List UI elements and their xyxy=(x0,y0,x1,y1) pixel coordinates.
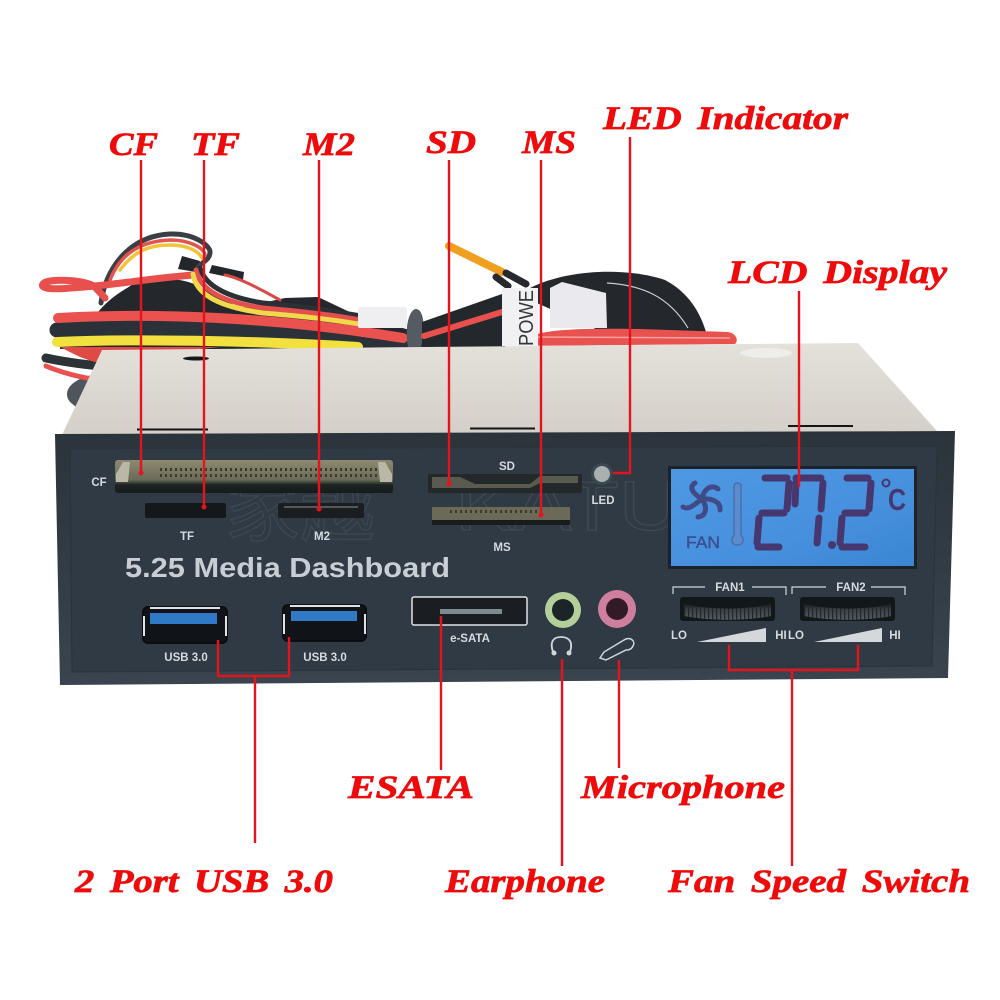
fan 2 switch: LO xyxy=(788,630,804,642)
thin red wires xyxy=(225,275,280,300)
SD slot: SD xyxy=(499,461,515,473)
fan 1 switch xyxy=(671,582,787,642)
icon: fan xyxy=(683,483,720,517)
M2 slot: M2 xyxy=(314,531,330,543)
callout: MS: MS xyxy=(521,125,576,161)
red loop cable xyxy=(42,275,194,298)
icon: thermometer xyxy=(732,483,743,545)
SD slot xyxy=(428,461,582,493)
power label: POWE xyxy=(516,290,538,346)
callout: Earphone: Earphone xyxy=(444,864,605,900)
USB port 2 xyxy=(283,605,366,664)
right black cable loop xyxy=(530,272,706,334)
faint watermark: 家越 xyxy=(225,467,375,551)
dark cable coil xyxy=(60,279,505,349)
fan 1 switch: FAN1 xyxy=(715,582,745,594)
callout: SD: SD xyxy=(426,125,476,161)
callout: LED Indicator: LED Indicator xyxy=(602,101,849,137)
fan 2 switch: FAN2 xyxy=(836,582,866,594)
fan 1 switch: LO xyxy=(671,630,687,642)
gray wire knot xyxy=(407,309,424,347)
main yellow wire xyxy=(57,340,358,347)
plate slots xyxy=(137,426,853,430)
white sleeve xyxy=(358,307,407,328)
degree Celsius symbol: C xyxy=(888,482,906,517)
inner frame xyxy=(70,446,937,672)
LED indicator: LED xyxy=(592,495,614,507)
callout: MS xyxy=(521,125,576,518)
callout: ESATA: ESATA xyxy=(347,770,474,806)
callout: 2 Port USB 3.0 xyxy=(74,637,333,900)
gray cable bulge xyxy=(67,375,92,407)
degree Celsius symbol xyxy=(882,480,906,517)
FAN label: FAN xyxy=(686,533,720,552)
white connector xyxy=(550,282,607,328)
fan 2 switch xyxy=(788,582,905,642)
TF slot: TF xyxy=(180,531,194,543)
under red wire xyxy=(60,347,220,362)
callout: CF xyxy=(109,127,158,476)
eSATA port: e-SATA xyxy=(450,633,490,645)
faint watermark: KATUM xyxy=(455,467,755,545)
power label xyxy=(502,288,538,346)
CF slot xyxy=(91,460,393,493)
sensor leads xyxy=(496,273,526,286)
callout: 2 Port USB 3.0: 2 Port USB 3.0 xyxy=(74,864,333,900)
earphone jack xyxy=(545,592,581,628)
callout: Fan Speed Switch xyxy=(667,645,970,900)
icon: headphones xyxy=(552,637,572,656)
callout: CF: CF xyxy=(109,127,158,163)
right black cable xyxy=(422,294,502,347)
eSATA port xyxy=(412,597,527,645)
small black connectors xyxy=(178,256,244,280)
LCD display xyxy=(668,466,917,569)
callout: TF xyxy=(191,127,240,510)
TF slot xyxy=(145,503,226,543)
MS slot xyxy=(432,507,570,554)
red wire loop xyxy=(516,329,737,346)
fan 2 switch: HI xyxy=(889,630,901,642)
microphone jack xyxy=(598,590,636,628)
M2 slot xyxy=(278,503,364,543)
main black wire xyxy=(57,329,410,344)
plate hole xyxy=(183,356,209,360)
ribbon arc xyxy=(101,234,210,303)
USB port 2: USB 3.0 xyxy=(303,652,347,664)
callout: M2 xyxy=(302,127,355,512)
fan 1 switch: HI xyxy=(775,630,787,642)
white sticker xyxy=(740,348,792,358)
callout: TF: TF xyxy=(191,127,240,163)
MS slot: MS xyxy=(493,542,511,554)
callout: LED Indicator xyxy=(602,101,849,473)
main red wire xyxy=(58,316,403,338)
heading: 5.25 Media Dashboard: 5.25 Media Dashboard xyxy=(125,552,450,583)
cable bundle xyxy=(42,234,737,407)
orange sensor xyxy=(449,246,502,272)
callout: Fan Speed Switch: Fan Speed Switch xyxy=(667,864,970,900)
callout: M2: M2 xyxy=(302,127,355,163)
front panel xyxy=(55,431,955,685)
lower left cable xyxy=(46,358,100,366)
CF slot: CF xyxy=(91,477,107,489)
top metal plate xyxy=(62,343,937,435)
callout: SD xyxy=(426,125,476,486)
USB port 1 xyxy=(143,607,227,664)
cable highlight xyxy=(607,283,688,328)
ribbon descending xyxy=(200,268,360,316)
callout: LCD Display: LCD Display xyxy=(727,255,947,291)
temperature digits 27.2 xyxy=(757,478,871,549)
LED indicator xyxy=(591,463,614,507)
USB port 1: USB 3.0 xyxy=(164,652,208,664)
right red wire xyxy=(424,312,502,336)
icon: microphone xyxy=(600,639,634,660)
callout: Microphone: Microphone xyxy=(580,770,785,806)
faint watermark xyxy=(225,467,755,551)
